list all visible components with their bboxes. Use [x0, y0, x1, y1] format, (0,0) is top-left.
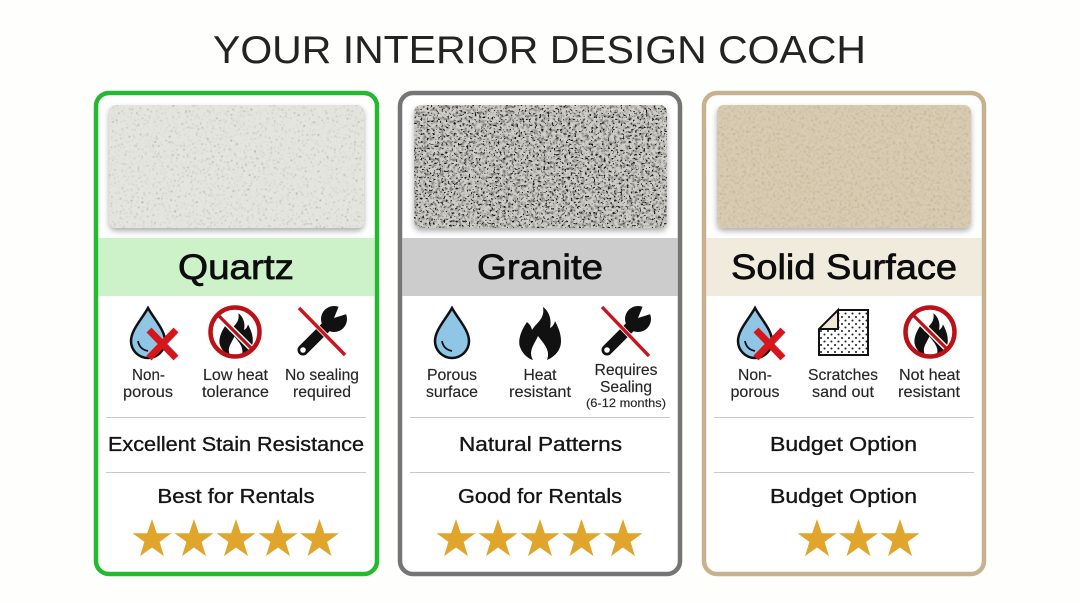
five stars — [132, 519, 339, 556]
rental rating text: Best for Rentals — [158, 486, 314, 508]
icon: flame — [519, 307, 561, 360]
label: scratches sand out: Scratches — [808, 367, 878, 384]
label: no sealing required: No sealing — [285, 367, 359, 384]
label: scratches sand out — [808, 367, 878, 401]
label: porous surface: surface — [426, 384, 478, 401]
three stars — [798, 519, 920, 556]
name band — [98, 238, 374, 296]
label: low heat tolerance: tolerance — [202, 384, 269, 401]
icon: not heat resistant — [906, 308, 954, 356]
name band — [706, 238, 982, 296]
icon: non-porous drop — [131, 308, 176, 358]
label: non-porous: Non- — [738, 367, 772, 384]
heading: Solid Surface: Solid Surface — [731, 248, 957, 287]
label: non-porous: porous — [123, 384, 173, 401]
icon: scratches sand out — [819, 310, 868, 355]
label: porous surface — [426, 367, 478, 401]
heading: Granite: Granite — [477, 248, 603, 287]
card outline — [400, 93, 680, 574]
icon: low heat tolerance — [210, 308, 260, 356]
label: scratches sand out: sand out — [812, 384, 875, 401]
rental rating text: Good for Rentals — [458, 486, 622, 508]
heading: Quartz: Quartz — [178, 248, 294, 287]
label: porous surface: Porous — [427, 367, 477, 384]
label: not heat resistant — [898, 367, 961, 401]
label: low heat tolerance: Low heat — [203, 367, 269, 384]
card outline — [96, 93, 377, 574]
feature: stain resistance: Excellent Stain Resistance — [108, 434, 364, 456]
label: not heat resistant: resistant — [898, 384, 961, 401]
label: low heat tolerance — [202, 367, 269, 401]
solid surface sample — [717, 105, 971, 228]
panel: Solid Surface — [704, 93, 984, 574]
label: requires sealing: Requires — [594, 362, 658, 379]
label: requires sealing — [586, 362, 666, 410]
icon: requires sealing wrench — [602, 301, 657, 356]
five stars — [436, 519, 642, 556]
card outline — [704, 93, 984, 574]
label: non-porous — [730, 367, 780, 401]
label: no sealing required — [285, 367, 359, 401]
granite sample — [414, 105, 667, 228]
label: non-porous — [123, 367, 173, 401]
icon: no sealing wrench — [299, 301, 353, 355]
label: requires sealing: (6-12 months) — [586, 396, 666, 410]
icon: porous drop — [435, 308, 469, 358]
label: non-porous: porous — [730, 384, 780, 401]
label: heat resistant: Heat — [524, 367, 557, 384]
feature: natural patterns: Natural Patterns — [459, 434, 622, 456]
name band — [402, 238, 678, 296]
panel: Granite — [400, 93, 680, 574]
label: no sealing required: required — [293, 384, 351, 401]
label: requires sealing: Sealing — [600, 379, 652, 396]
label: heat resistant — [509, 367, 572, 401]
rental rating text: Budget Option — [770, 486, 917, 508]
icon: non-porous drop — [738, 308, 783, 358]
quartz sample — [109, 105, 364, 228]
label: not heat resistant: Not heat — [899, 367, 961, 384]
label: non-porous: Non- — [132, 367, 165, 384]
panel: Quartz — [96, 93, 377, 574]
label: heat resistant: resistant — [509, 384, 572, 401]
title: YOUR INTERIOR DESIGN COACH — [213, 29, 866, 72]
feature: budget option: Budget Option — [770, 434, 917, 456]
